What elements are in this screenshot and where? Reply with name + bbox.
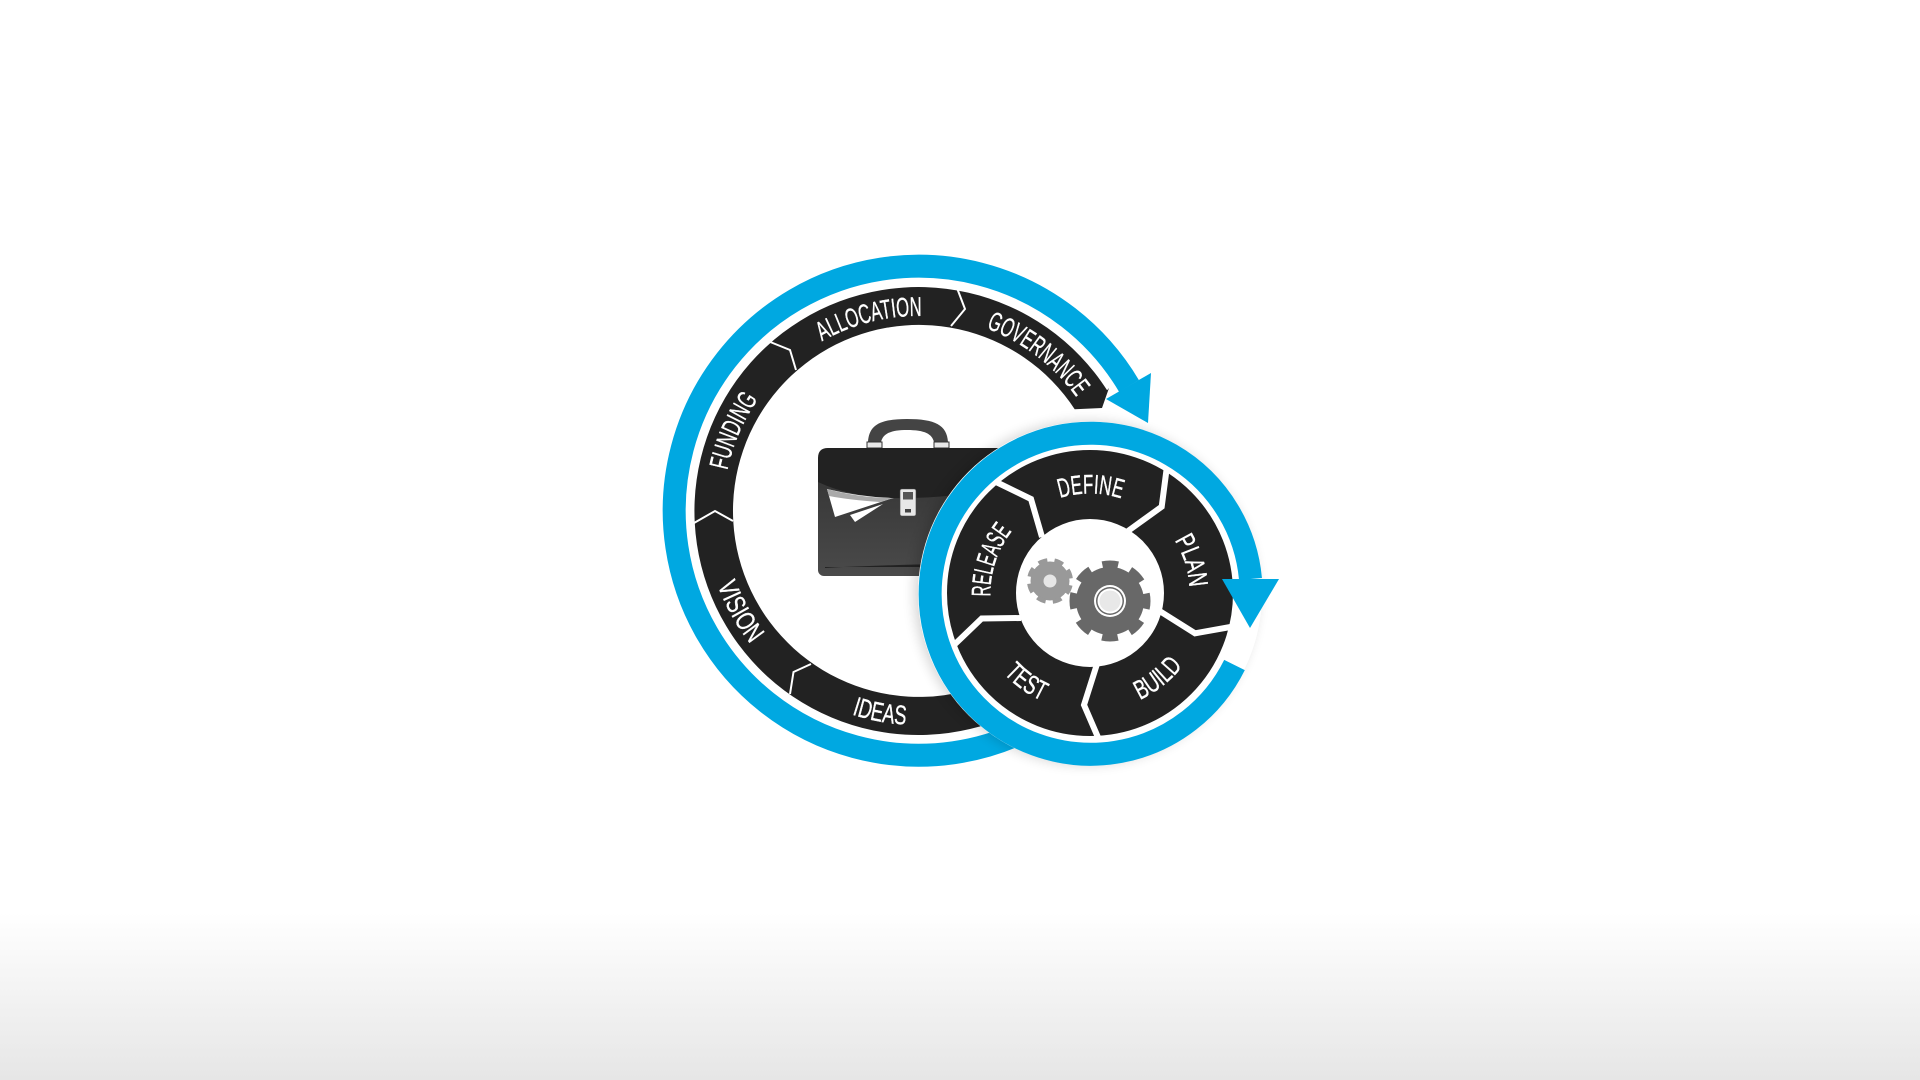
- icon: large gear: [1074, 565, 1146, 637]
- outer ring separators: [694, 288, 965, 694]
- inner ring separators: [953, 466, 1236, 742]
- label: funding: FUNDING: [709, 392, 756, 470]
- arrow: outer blue cycle: [674, 266, 1151, 755]
- label: plan: PLAN: [1175, 532, 1208, 586]
- briefcase handle: [868, 419, 948, 442]
- label: release: RELEASE: [972, 521, 1012, 596]
- label: vision: VISION: [719, 578, 765, 643]
- white disc: [918, 422, 1262, 766]
- label: build: BUILD: [1132, 657, 1180, 700]
- dark ring band: [982, 484, 1198, 702]
- label: ideas: IDEAS: [853, 697, 906, 725]
- dark ring band: [694, 287, 1109, 735]
- label: test: TEST: [1006, 660, 1050, 699]
- outer ring: portfolio stages: [694, 287, 1109, 735]
- inner cycle: delivery stages: [918, 422, 1279, 766]
- label: define: DEFINE: [1056, 474, 1126, 498]
- icon: briefcase: [818, 419, 1013, 576]
- label: governance: GOVERNANCE: [989, 312, 1091, 397]
- briefcase body: [818, 470, 1013, 576]
- clasp: [900, 489, 916, 516]
- icon: small gear: [1026, 557, 1074, 605]
- briefcase flap: [818, 448, 1013, 498]
- arrow: inner blue cycle: [930, 433, 1279, 754]
- disc shadow: [914, 421, 1258, 765]
- papers: [827, 489, 894, 522]
- bottom seam: [825, 563, 1010, 568]
- label: allocation: ALLOCATION: [817, 297, 920, 342]
- handle brackets: [867, 442, 949, 448]
